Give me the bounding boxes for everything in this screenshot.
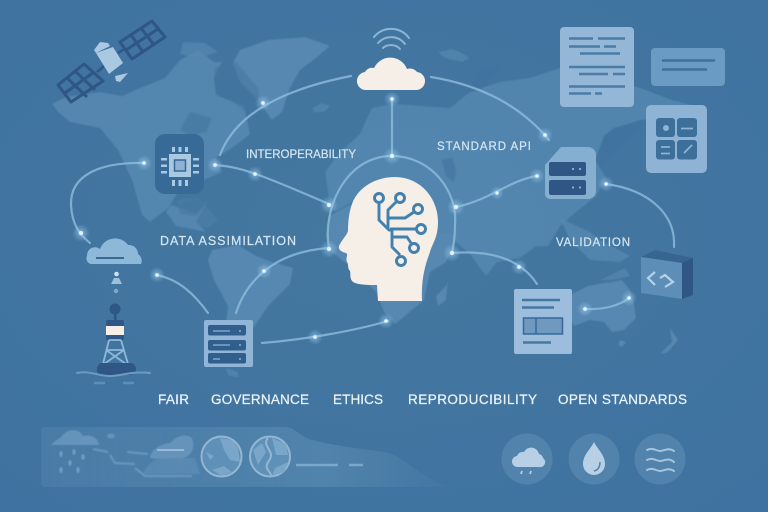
document: top right page [560, 27, 634, 107]
icon: processor chip [155, 134, 204, 194]
circuit traces [374, 194, 426, 266]
icon: satellite [58, 21, 165, 102]
principles row: FAIR [158, 392, 189, 407]
river lines [296, 464, 363, 466]
central head with circuit [339, 177, 438, 301]
icon: cloud with wifi [357, 29, 425, 90]
principles row: GOVERNANCE [211, 392, 309, 407]
connector lines [71, 76, 674, 343]
principles row: OPEN STANDARDS [558, 392, 687, 407]
connector nodes [72, 91, 637, 345]
panel: climate strip [41, 427, 448, 487]
rain cloud [51, 430, 99, 473]
document: report page [514, 289, 572, 354]
map labels: INTEROPERABILITY [246, 149, 356, 161]
icon: rain cloud [502, 434, 552, 484]
map labels: VALIDATION [556, 237, 630, 249]
icon: ocean buoy [77, 304, 150, 383]
stream clouds [93, 434, 200, 476]
panel: dashboard widget [646, 105, 707, 173]
panel: note card [651, 48, 725, 86]
map labels: DATA ASSIMILATION [160, 234, 296, 248]
icon: water drop [568, 434, 620, 484]
icon: code cube [641, 250, 693, 299]
globe 1 [202, 436, 242, 476]
icon: cloud with sensor uplink [86, 238, 142, 293]
map dark seas [178, 62, 640, 216]
icon: storage card [545, 147, 596, 199]
world map [52, 37, 694, 378]
map labels: STANDARD API [437, 141, 531, 153]
principles row: ETHICS [333, 392, 383, 407]
map labels [160, 141, 630, 249]
icon: server rack [204, 320, 253, 367]
globe 2 [250, 436, 290, 476]
principles row [158, 392, 687, 407]
icon: waves [634, 434, 686, 484]
principles row: REPRODUCIBILITY [408, 392, 537, 407]
